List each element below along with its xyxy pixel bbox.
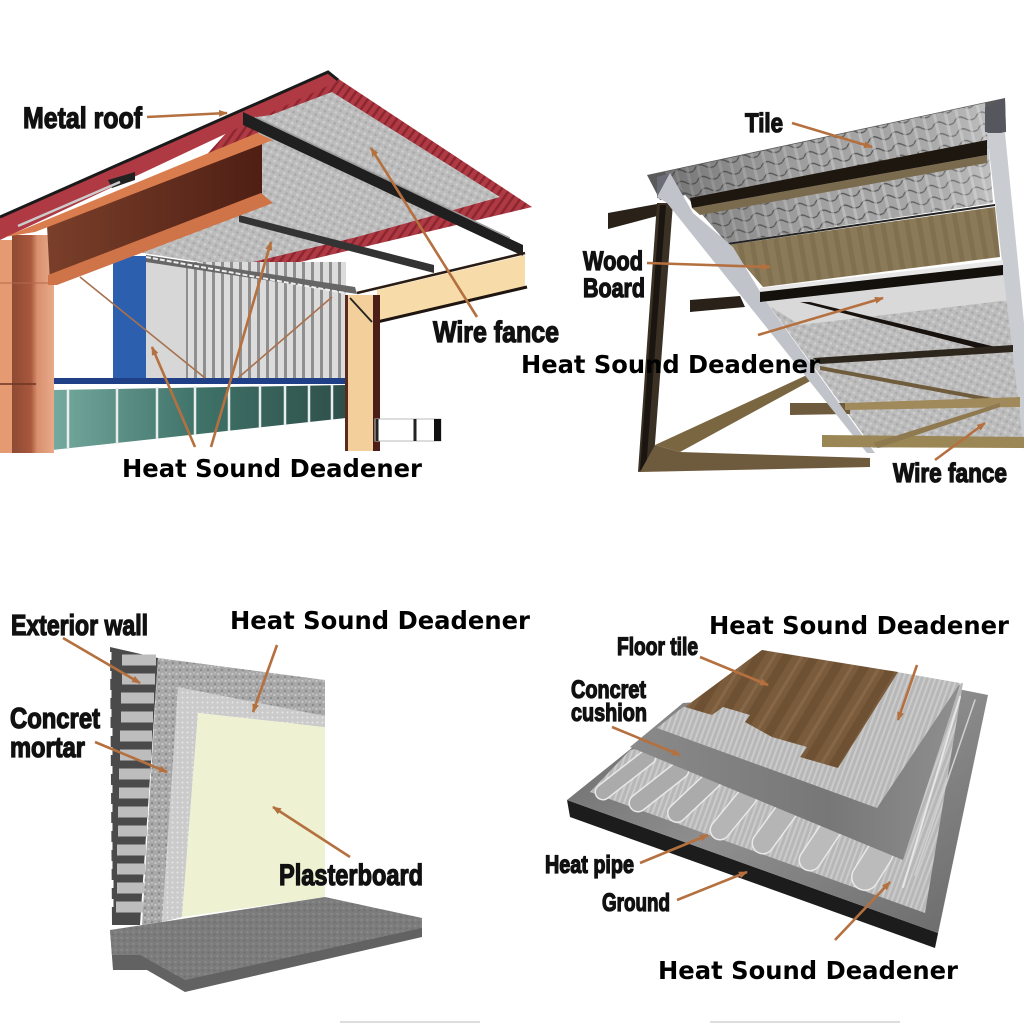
label: concrete mortar: Concret: [10, 703, 100, 735]
arrow: heat sound deadener bottom: [835, 882, 890, 940]
heading: heat sound deadener, tile roof: Heat Sound Deadener: [521, 350, 821, 379]
label: wire fance: Wire fance: [433, 316, 559, 349]
panel: tile roof structure: [583, 98, 1024, 488]
label: heat pipe: Heat pipe: [545, 851, 634, 879]
heading: heat sound deadener, metal roof: Heat Sound Deadener: [122, 454, 423, 483]
pipe layer: [590, 683, 963, 913]
roof underside: [0, 72, 532, 268]
panel: wall structure: [10, 610, 423, 992]
label: plasterboard: Plasterboard: [279, 859, 423, 892]
label: metal roof: Metal roof: [23, 102, 143, 135]
heat sound deadener layer: [162, 687, 325, 922]
girders: [657, 133, 1024, 453]
back wall corrugated panels: [52, 256, 348, 450]
label: ground: Ground: [602, 889, 670, 917]
panel: floor structure: [545, 633, 988, 948]
label: concrete cushion: cushion: [571, 699, 647, 727]
beams: [690, 140, 1024, 448]
arrow: tile: [792, 123, 872, 147]
label: floor tile: Floor tile: [617, 633, 698, 661]
red steel column and beam: [0, 133, 273, 453]
label: concrete cushion: Concret: [571, 676, 647, 704]
heading: heat sound deadener, floor top: Heat Sound Deadener: [709, 611, 1010, 640]
arrow: wire fance: [935, 423, 985, 460]
label: concrete mortar: [10, 703, 100, 764]
brick layer: [110, 647, 158, 925]
arrow: exterior wall: [63, 638, 140, 683]
floor slab: [110, 897, 422, 992]
label: tile: Tile: [745, 108, 783, 138]
arrows: heat sound deadener: [80, 242, 332, 447]
arrow: floor tile: [700, 657, 768, 685]
arrow: ground: [677, 872, 747, 900]
label: wood board: Wood: [583, 246, 643, 276]
timber frame: [608, 203, 870, 472]
ground slab: [567, 650, 988, 948]
arrow: wire fance: [371, 148, 477, 317]
arrow: heat pipe: [640, 835, 708, 863]
purlins: [146, 112, 523, 294]
concrete mortar: [142, 658, 325, 925]
arrow: concrete cushion: [612, 727, 680, 755]
label: concrete cushion: [571, 676, 647, 727]
label: wood board: [583, 246, 645, 303]
deadener layer: [657, 672, 960, 808]
heading: heat sound deadener, wall: Heat Sound Deadener: [230, 606, 531, 635]
floor tile: [685, 650, 898, 768]
label: wood board: Board: [583, 273, 645, 303]
arrow: concrete mortar: [95, 742, 167, 772]
heat pipes: [603, 697, 975, 887]
roof layers: [647, 98, 1024, 448]
arrow: plasterboard: [273, 807, 350, 857]
concrete cushion layer: [630, 685, 960, 860]
arrow: heat sound deadener: [758, 298, 883, 335]
label: exterior wall: Exterior wall: [11, 610, 148, 642]
label: concrete mortar: mortar: [10, 732, 85, 764]
arrow: metal roof: [147, 113, 227, 117]
plasterboard: [182, 713, 325, 917]
heading: heat sound deadener, floor bottom: Heat Sound Deadener: [658, 956, 959, 985]
panel: metal roof structure: [0, 72, 559, 453]
arrow: heat sound deadener: [253, 645, 277, 712]
arrow: heat sound deadener top: [898, 665, 917, 720]
arrow: wood board: [647, 263, 770, 267]
cream steel frame: [345, 253, 527, 451]
